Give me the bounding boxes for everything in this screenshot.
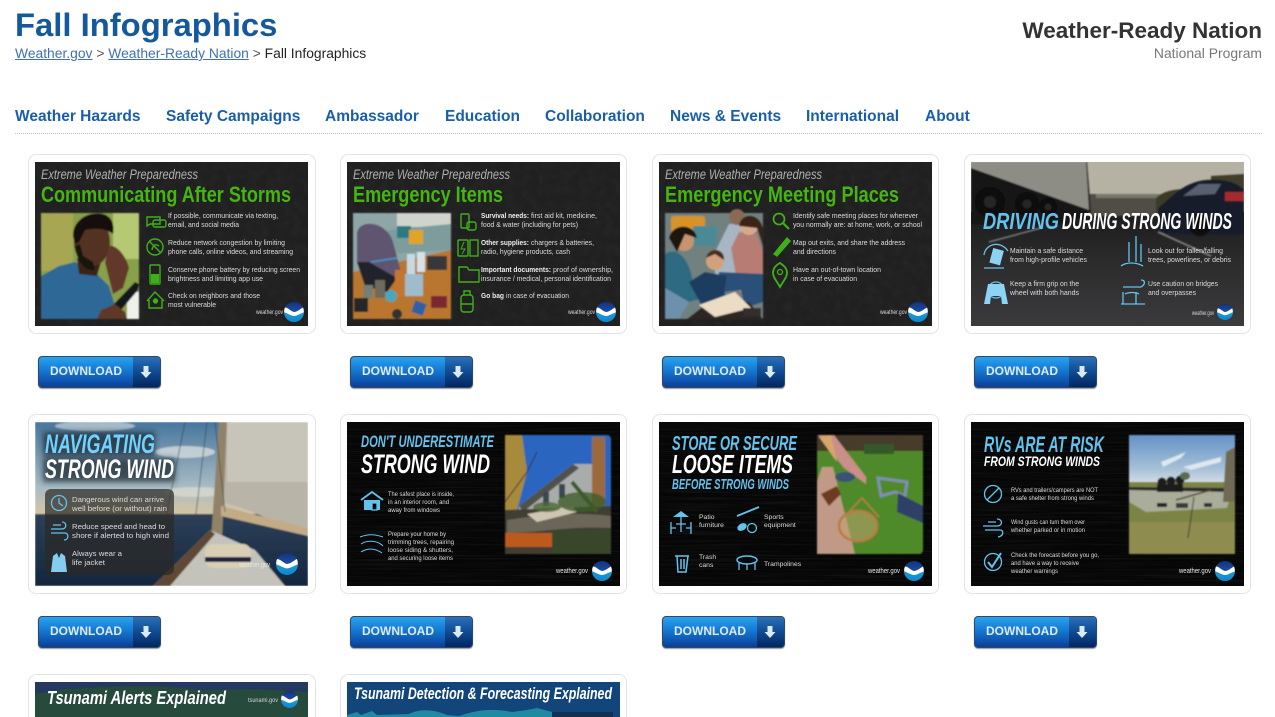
bullet text: Keep a firm grip on the bbox=[1010, 279, 1079, 288]
bullet text: The safest place is inside, bbox=[388, 491, 454, 498]
download button: DOWNLOAD bbox=[674, 624, 746, 638]
heading: DON'T UNDERESTIMATE bbox=[361, 432, 494, 451]
bullet text bbox=[388, 491, 454, 562]
bullet text: and securing loose items bbox=[388, 555, 454, 562]
page title: Fall Infographics bbox=[15, 6, 277, 43]
source and logo: weather.gov bbox=[255, 310, 283, 316]
bullet text: Use caution on bridges bbox=[1148, 279, 1218, 288]
card: tsunami alerts explained bbox=[28, 674, 316, 717]
photo: emergency kit bbox=[353, 213, 451, 319]
wave graphic bbox=[347, 708, 552, 717]
navigation bar: International bbox=[806, 108, 899, 125]
bullet text: chargers & batteries, bbox=[531, 238, 594, 247]
bullet text: shore if alerted to high wind bbox=[72, 531, 169, 540]
icons bbox=[51, 496, 68, 572]
bullet text: proof of ownership, bbox=[553, 265, 613, 274]
bullet text: Other supplies: bbox=[481, 238, 529, 247]
bullet text: RVs and trailers/campers are NOT bbox=[1011, 487, 1098, 494]
source and logo bbox=[238, 553, 298, 575]
download button: DOWNLOAD bbox=[674, 364, 746, 378]
bullet text: trimming trees, repairing bbox=[388, 539, 454, 546]
source and logo: weather.gov bbox=[238, 562, 271, 569]
icons bbox=[147, 217, 166, 308]
dark note box bbox=[552, 712, 613, 717]
source and logo bbox=[255, 302, 304, 322]
card: don't underestimate strong wind bbox=[340, 414, 627, 594]
heading: Emergency Items bbox=[353, 182, 503, 207]
bullet text: Wind gusts can turn them over bbox=[1011, 519, 1086, 526]
download button: DOWNLOAD bbox=[50, 624, 122, 638]
icons bbox=[983, 486, 1003, 570]
navigation bar: About bbox=[925, 108, 970, 125]
subtitle: Extreme Weather Preparedness bbox=[353, 167, 510, 182]
mountain background bbox=[35, 686, 308, 717]
card: RVs are at risk bbox=[964, 414, 1251, 594]
bullet text bbox=[71, 495, 169, 567]
source and logo bbox=[555, 561, 612, 581]
bullet text: Reduce network congestion by limiting bbox=[168, 238, 285, 247]
navigation bar: Weather Hazards bbox=[15, 108, 140, 125]
bullet text: a safe shelter from strong winds bbox=[1011, 495, 1095, 502]
source and logo: weather.gov bbox=[867, 568, 900, 575]
source and logo bbox=[1191, 304, 1233, 320]
heading bbox=[984, 432, 1105, 469]
source and logo: tsunami.gov bbox=[248, 698, 278, 704]
bullet text: you normally are: at home, work, or school bbox=[793, 220, 922, 229]
download button bbox=[350, 616, 473, 648]
download button bbox=[662, 616, 785, 648]
photo: sailboat bbox=[35, 421, 308, 586]
bullet text: away from windows bbox=[388, 507, 441, 514]
source and logo bbox=[248, 691, 298, 708]
bullet text: food & water (including for pets) bbox=[481, 220, 578, 229]
bullet text: Check on neighbors and those bbox=[168, 291, 260, 300]
bullet text: Dangerous wind can arrive bbox=[72, 495, 164, 504]
card: driving during strong winds bbox=[964, 154, 1251, 334]
heading: Tsunami Alerts Explained bbox=[47, 688, 227, 708]
icons bbox=[671, 507, 759, 572]
bullet text: Reduce speed and head to bbox=[72, 522, 165, 531]
bullet text: Survival needs: bbox=[481, 211, 529, 220]
breadcrumb: Weather.gov > Weather-Ready Nation > Fall Infographics bbox=[15, 45, 366, 61]
info panel bbox=[45, 489, 174, 575]
heading: RVs ARE AT RISK bbox=[984, 432, 1105, 457]
bullet text: Check the forecast before you go, bbox=[1011, 552, 1099, 559]
bullet text: life jacket bbox=[72, 558, 105, 567]
heading: DRIVING bbox=[983, 208, 1059, 234]
navigation bar: Ambassador bbox=[325, 108, 419, 125]
heading: STRONG WIND bbox=[361, 449, 490, 479]
bullet text: and directions bbox=[793, 247, 836, 256]
download button: DOWNLOAD bbox=[50, 364, 122, 378]
navigation bar: Collaboration bbox=[545, 108, 645, 125]
bullet text: Conserve phone battery by reducing screen bbox=[168, 265, 300, 274]
bullet text bbox=[1010, 487, 1099, 575]
item labels: Trash bbox=[699, 554, 716, 561]
bullet text bbox=[481, 211, 613, 300]
navigation bar: Safety Campaigns bbox=[166, 108, 300, 125]
bullet text: whether parked or in motion bbox=[1010, 527, 1085, 534]
bullet text: insurance / medical, personal identification bbox=[481, 274, 611, 283]
icons bbox=[773, 214, 790, 287]
source and logo: weather.gov bbox=[555, 568, 588, 575]
card: tsunami detection and forecasting explained bbox=[340, 674, 627, 717]
subtitle: Extreme Weather Preparedness bbox=[41, 167, 198, 182]
heading bbox=[45, 429, 174, 484]
bullet text: Look out for fallen/falling bbox=[1148, 246, 1223, 255]
bullet text: brightness and limiting app use bbox=[168, 274, 263, 283]
source and logo: weather.gov bbox=[1191, 311, 1214, 317]
bullet text: Have an out-of-town location bbox=[793, 265, 881, 274]
photo: overturned RV bbox=[1129, 435, 1235, 554]
photo: family with map bbox=[665, 209, 763, 319]
bullet text: If possible, communicate via texting, bbox=[168, 211, 278, 220]
heading: FROM STRONG WINDS bbox=[984, 453, 1100, 469]
source and logo bbox=[567, 302, 616, 322]
source and logo: weather.gov bbox=[879, 310, 907, 316]
download button: DOWNLOAD bbox=[362, 624, 434, 638]
bullet text: Prepare your home by bbox=[388, 531, 447, 538]
bullet text: in case of evacuation bbox=[793, 274, 857, 283]
bullet text: in case of evacuation bbox=[506, 291, 569, 300]
download button bbox=[38, 356, 161, 388]
photo: tree on house bbox=[505, 435, 611, 554]
source and logo: weather.gov bbox=[567, 310, 595, 316]
bullet text: Map out exits, and share the address bbox=[793, 238, 905, 247]
download button: DOWNLOAD bbox=[986, 624, 1058, 638]
item labels bbox=[699, 514, 802, 569]
item labels: cans bbox=[699, 562, 714, 569]
download button bbox=[38, 616, 161, 648]
item labels: Patio bbox=[699, 514, 715, 521]
bullet text: wheel with both hands bbox=[1009, 288, 1079, 297]
bullet text: from high-profile vehicles bbox=[1010, 255, 1087, 264]
bullet text bbox=[168, 211, 300, 309]
heading: NAVIGATING bbox=[45, 429, 155, 459]
program subtitle: National Program bbox=[1154, 45, 1262, 61]
bullet text: first aid kit, medicine, bbox=[531, 211, 597, 220]
bullet text: in an interior room, and bbox=[388, 499, 449, 506]
bullet text: trees, powerlines, or debris bbox=[1148, 255, 1231, 264]
bullet text: Identify safe meeting places for wherever bbox=[793, 211, 918, 220]
program name: Weather-Ready Nation bbox=[1022, 18, 1262, 43]
download button bbox=[974, 356, 1097, 388]
heading: BEFORE STRONG WINDS bbox=[672, 477, 789, 493]
bullet text: Important documents: bbox=[481, 265, 551, 274]
source and logo bbox=[1178, 561, 1235, 581]
download button: DOWNLOAD bbox=[362, 364, 434, 378]
source and logo bbox=[867, 561, 924, 581]
icons bbox=[984, 236, 1145, 304]
card: navigating strong wind bbox=[28, 414, 316, 594]
icons bbox=[458, 214, 479, 312]
bullet text: Always wear a bbox=[72, 549, 123, 558]
photo: highway with truck and car bbox=[971, 162, 1244, 256]
heading: STORE OR SECURE bbox=[672, 433, 797, 455]
bullet text: email, and social media bbox=[168, 220, 240, 229]
bullet text: Go bag bbox=[481, 291, 504, 300]
download button: DOWNLOAD bbox=[986, 364, 1058, 378]
bullet text: well before (or without) rain bbox=[71, 504, 167, 513]
bullet text: phone calls, online videos, and streaming bbox=[168, 247, 293, 256]
download button bbox=[350, 356, 473, 388]
title shadow bbox=[43, 432, 175, 482]
item labels: furniture bbox=[699, 522, 724, 529]
item labels: Sports bbox=[764, 514, 784, 521]
card: emergency items bbox=[340, 154, 627, 334]
download button bbox=[974, 616, 1097, 648]
item labels: Trampolines bbox=[764, 561, 802, 568]
bullet text: loose siding & shutters, bbox=[388, 547, 453, 554]
heading bbox=[361, 432, 494, 479]
heading: STRONG WIND bbox=[45, 454, 174, 484]
navigation bar: News & Events bbox=[670, 108, 781, 125]
bullet text: radio, hygiene products, cash bbox=[481, 247, 570, 256]
heading bbox=[672, 433, 797, 493]
subtitle: Extreme Weather Preparedness bbox=[665, 167, 822, 182]
bullet text: most vulnerable bbox=[168, 300, 216, 309]
photo: overturned yard furniture bbox=[817, 435, 923, 554]
navigation bar bbox=[15, 108, 1262, 134]
heading bbox=[983, 208, 1232, 234]
card: communicating after storms bbox=[28, 154, 316, 334]
download button bbox=[662, 356, 785, 388]
bullet text: Maintain a safe distance bbox=[1010, 246, 1083, 255]
navigation bar: Education bbox=[445, 108, 520, 125]
icons bbox=[360, 492, 383, 553]
bullet text: weather warnings bbox=[1010, 568, 1059, 575]
bullet text bbox=[1009, 246, 1231, 297]
bullet text: and have a way to receive bbox=[1011, 560, 1079, 567]
photo: man with phone bbox=[41, 213, 139, 319]
source and logo: weather.gov bbox=[1178, 568, 1211, 575]
heading: LOOSE ITEMS bbox=[672, 451, 793, 479]
card: store or secure loose items bbox=[652, 414, 939, 594]
item labels: equipment bbox=[764, 522, 796, 529]
bullet text bbox=[793, 211, 922, 283]
card: emergency meeting places bbox=[652, 154, 939, 334]
source and logo bbox=[879, 302, 928, 322]
bullet text: and overpasses bbox=[1148, 288, 1196, 297]
